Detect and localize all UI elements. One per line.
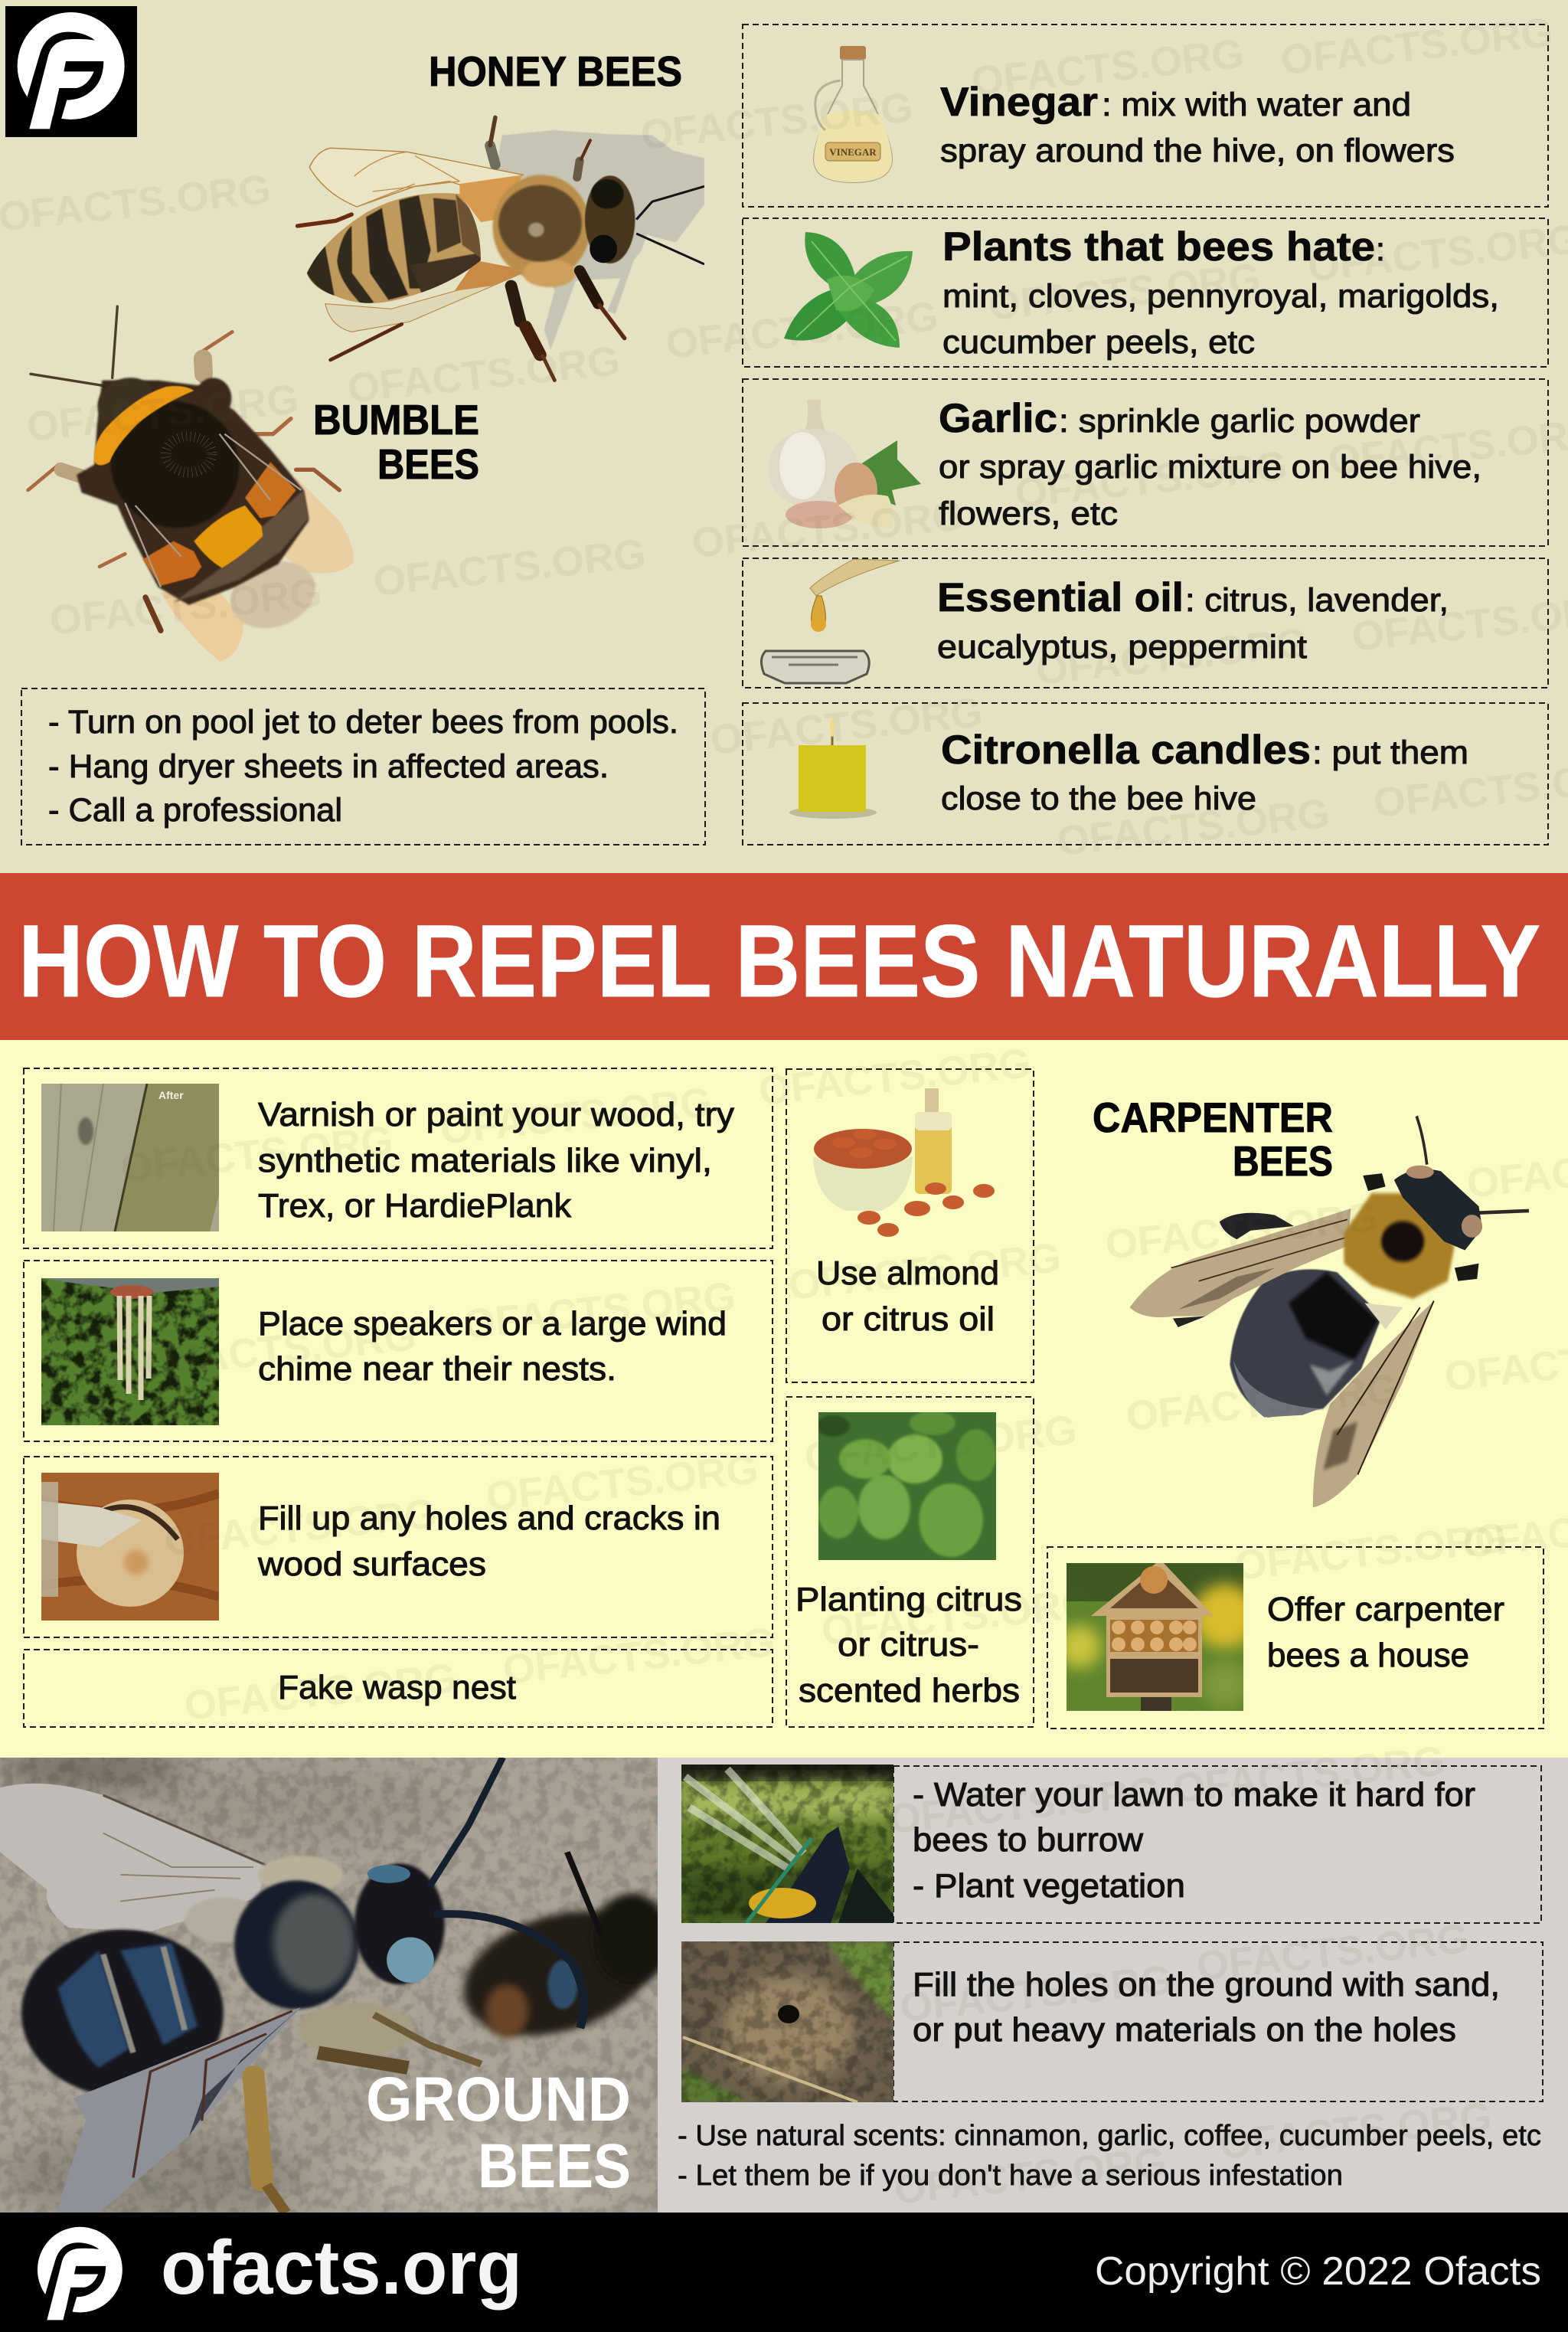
panel border [1047,1547,1544,1729]
panel border [24,1261,773,1441]
watermarks: OFACTS.ORG [986,255,1263,329]
text: essential oil: : citrus, lavender, [1185,582,1449,619]
text: garlic: or spray garlic mixture on bee hive, [939,449,1481,486]
text: garlic: : sprinkle garlic powder [1059,403,1420,440]
text: fill ground holes [913,1966,1500,2049]
panel: varnish wood [24,1068,773,1248]
tip: professional: - Call a professional [48,792,342,829]
panel border [743,218,1548,367]
icon: footer logo [36,2227,122,2323]
panel border [743,25,1548,207]
heading: ground bees: BEES [478,2131,631,2201]
text: ground bee tips: - Let them be if you don't have a serious infestation [678,2160,1343,2192]
text: citronella: close to the bee hive [941,780,1256,817]
panel: fake wasp nest [24,1650,773,1727]
watermarks: OFACTS.ORG [1217,2094,1494,2168]
section background: carpenter bees [0,1040,1568,1758]
heading: carpenter bees [1093,1094,1333,1185]
text: plants: cucumber peels, etc [942,324,1255,361]
watermarks: OFACTS.ORG [898,1957,1174,2031]
photo: honey bee [298,117,704,381]
panel: citrus herbs [786,1397,1034,1727]
watermarks: OFACTS.ORG [1124,1366,1400,1440]
heading: honey bees: HONEY BEES [429,47,682,95]
tip: dryer sheets: - Hang dryer sheets in affected areas. [48,748,609,785]
heading: bumble bees: BUMBLE [313,396,479,443]
text: varnish: synthetic materials like vinyl, [258,1142,712,1179]
text: varnish: Varnish or paint your wood, try [258,1096,734,1133]
panel: citronella candles [743,703,1548,845]
text: ground bee tips [678,2120,1541,2192]
watermarks: OFACTS.ORG [664,293,940,368]
watermarks: OFACTS.ORG [142,1313,418,1387]
watermarks: OFACTS.ORG [24,376,301,450]
text: citronella: Citronella candles [941,728,1311,773]
text: vinegar: spray around the hive, on flowers [940,132,1455,169]
text: essential oil: Essential oil [937,575,1184,620]
watermarks: OFACTS.ORG [819,1580,1096,1654]
heading: ground bees: GROUND [366,2065,631,2134]
section background: top (honey and bumble bees) [0,0,1568,873]
photo: bumble bee [28,306,353,661]
text: offer house: Offer carpenter [1267,1591,1504,1628]
panel: essential oil [743,558,1548,688]
watermarks: OFACTS.ORG [501,1619,777,1693]
text: vinegar: Vinegar [940,80,1098,125]
text: garlic [939,396,1481,532]
photo: citrus herb [816,1411,996,1560]
text: almond [816,1254,999,1338]
text: fake wasp nest: Fake wasp nest [278,1669,516,1706]
watermarks: OFACTS.ORG [47,570,324,644]
text: water lawn: bees to burrow [913,1821,1143,1859]
text: citronella: : put them [1312,734,1468,771]
watermarks: OFACTS.ORG [887,1768,1163,1843]
panel: general tips [21,688,705,845]
text: vinegar: : mix with water and [1102,87,1411,123]
panel: offer a house [1047,1547,1544,1729]
icon: mint leaves [784,232,913,348]
watermarks: OFACTS.ORG [345,338,622,412]
watermarks: OFACTS.ORG [1279,9,1555,83]
heading: carpenter bees: BEES [1233,1137,1333,1185]
heading: bumble bees: BEES [377,440,479,488]
text: garlic: Garlic [939,396,1057,441]
tip: pool jet: - Turn on pool jet to deter bees from pools. [48,704,678,741]
text: fill holes: Fill up any holes and cracks in [258,1500,720,1537]
panel border [786,1397,1034,1727]
text: almond: Use almond [816,1254,999,1292]
panel border [24,1457,773,1637]
icon: garlic bulb [768,400,921,528]
photo: carpenter bee [1129,1116,1529,1507]
watermarks: OFACTS.ORG [371,531,648,605]
text: plants: : [1376,231,1385,268]
watermarks: OFACTS.ORG [182,1655,459,1729]
watermarks: OFACTS.ORG [162,1490,439,1565]
watermarks: OFACTS.ORG [1055,790,1331,865]
icon: almonds and oil bottle [813,1088,995,1237]
text: almond: or citrus oil [822,1300,995,1338]
text: ground bee tips: - Use natural scents: cinnamon, garlic, coffee, cucumber peels, etc [678,2120,1541,2152]
watermarks: OFACTS.ORG [1103,1194,1380,1268]
text: offer house: bees a house [1267,1637,1469,1674]
photo: ground bee [0,1750,675,2221]
text: water lawn [913,1776,1475,1905]
text: fill ground holes: or put heavy materials on the holes [913,2011,1456,2049]
footer [0,2213,1568,2332]
logo: ofacts badge [5,6,137,137]
panel border [786,1069,1034,1382]
panel border [743,379,1548,546]
watermarks: OFACTS.ORG [484,1446,760,1520]
footer site name: ofacts.org [161,2225,522,2311]
heading: bumble bees [313,396,479,488]
watermarks: OFACTS.ORG [0,166,273,240]
photo: painted wood [41,1084,219,1231]
panel: vinegar [743,25,1548,207]
watermarks: OFACTS.ORG [119,1117,395,1192]
watermarks: OFACTS.ORG [1171,1738,1447,1812]
text: plants: Plants that bees hate [942,224,1375,270]
watermarks: OFACTS.ORG [461,1274,737,1348]
panel border [24,1068,773,1248]
panel: plants [743,218,1548,367]
watermarks: OFACTS.ORG [802,1407,1079,1481]
photo: wind chime [41,1278,219,1425]
icon: oil dropper [761,559,900,683]
photo: burrow hole [681,1941,893,2102]
text: speakers: Place speakers or a large wind [258,1305,727,1343]
panel: almond oil [786,1069,1034,1382]
watermarks: OFACTS.ORG [1013,443,1289,517]
title banner [0,873,1568,1040]
text: speakers [258,1305,727,1388]
panel border [743,703,1548,845]
text: plants: mint, cloves, pennyroyal, marigolds, [942,278,1499,315]
text: fill ground holes: Fill the holes on the ground with sand, [913,1966,1500,2003]
watermarks: OFACTS.ORG [1233,1515,1509,1589]
watermarks: OFACTS.ORG [639,84,915,159]
watermarks: OFACTS.ORG [969,31,1246,105]
text: herbs [795,1581,1022,1709]
text: fill holes: wood surfaces [257,1545,486,1583]
text: fill holes [257,1500,720,1583]
panel: water the lawn [681,1765,1541,1923]
panel: garlic [743,379,1548,546]
watermarks: OFACTS.ORG [438,1079,714,1153]
text: vinegar [940,80,1455,169]
photo: lawn sprinkler [681,1765,893,1923]
text: essential oil [937,575,1449,666]
panel border [893,1766,1541,1923]
text: varnish [258,1096,734,1225]
text: herbs: scented herbs [799,1672,1020,1709]
photo: filled wood hole [41,1473,219,1621]
photo: bee house [1067,1563,1243,1711]
text: garlic: flowers, etc [939,496,1118,532]
heading: ground bees [366,2065,631,2201]
text: essential oil: eucalyptus, peppermint [937,629,1307,666]
watermarks: OFACTS.ORG [892,2139,1168,2213]
text: herbs: or citrus- [838,1626,979,1663]
section background: ground bees [658,1758,1568,2213]
footer copyright: Copyright © 2022 Ofacts [1095,2249,1541,2294]
panel border [743,558,1548,688]
text: water lawn: - Plant vegetation [913,1867,1185,1905]
photo: painted wood: After [158,1089,184,1101]
text: citronella [941,728,1468,817]
panel border [24,1650,773,1727]
watermarks: OFACTS.ORG [786,1235,1063,1309]
text: plants [942,224,1499,361]
text: offer house [1267,1591,1504,1674]
text: herbs: Planting citrus [795,1581,1022,1618]
footer bar [0,2213,1568,2332]
watermarks: OFACTS.ORG [1034,620,1310,694]
icon: vinegar bottle: VINEGAR [829,146,877,158]
panel border [21,688,705,845]
text: varnish: Trex, or HardiePlank [258,1187,572,1225]
panel: fill ground holes [681,1941,1543,2102]
heading: carpenter bees: CARPENTER [1093,1094,1333,1141]
icon: candle [789,718,877,819]
text: speakers: chime near their nests. [258,1350,616,1388]
watermarks: OFACTS.ORG [690,492,966,567]
panel border [893,1942,1543,2101]
panel: speakers and wind chime [24,1261,773,1441]
watermarks: OFACTS.ORG [1194,1915,1471,1990]
icon: vinegar bottle [814,46,892,182]
panel: fill holes [24,1457,773,1637]
text: water lawn: - Water your lawn to make it hard for [913,1776,1475,1814]
watermarks: OFACTS.ORG [756,1040,1033,1114]
watermarks: OFACTS.ORG [708,689,985,764]
